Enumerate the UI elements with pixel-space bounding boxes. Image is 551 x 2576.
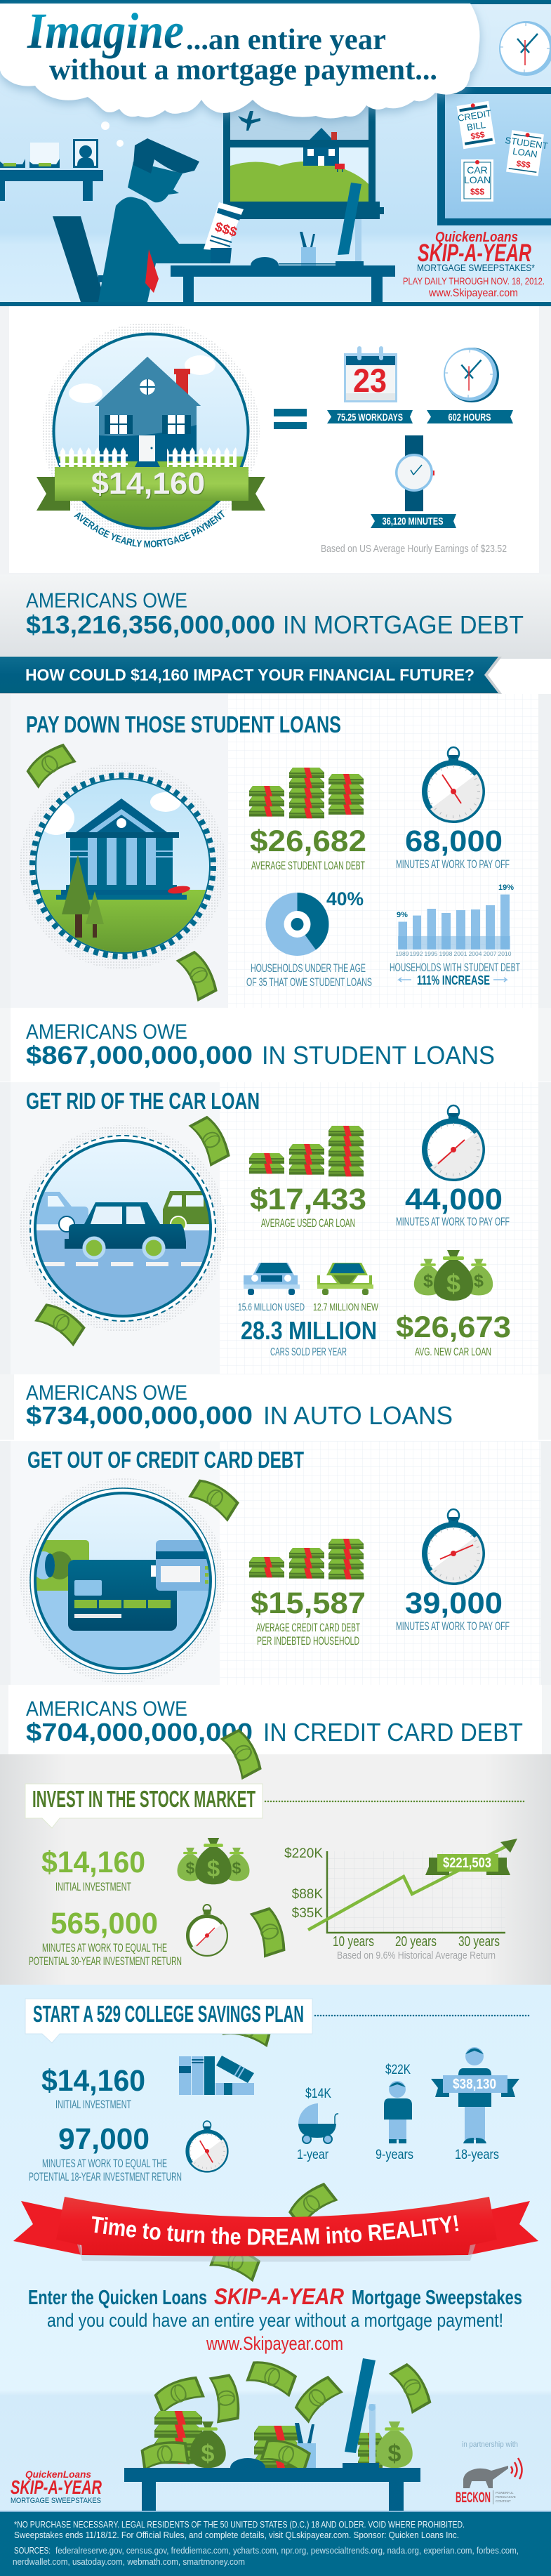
stat: new car loan: AVG. NEW CAR LOAN	[415, 1346, 491, 1358]
icon: falling bill	[188, 1113, 233, 1167]
stat: minutes to pay off	[396, 824, 510, 871]
icon: college graduate with ribbon	[431, 2047, 519, 2162]
icon: money bags: $	[232, 1859, 241, 1877]
partner logo: Beckon: BECKON	[456, 2490, 491, 2506]
badge: house with ribbon: AVERAGE YEARLY MORTGAGE PAYMENT	[74, 510, 225, 548]
icon: child: 9-years	[376, 2148, 413, 2162]
middle money pile	[254, 2426, 301, 2469]
stat: cars sold per year	[238, 1301, 379, 1358]
stat: minutes at work: POTENTIAL 30-YEAR INVESTMENT RETURN	[29, 1954, 182, 1968]
heading callout: START A 529 COLLEGE SAVINGS PLAN	[33, 2001, 304, 2027]
stat: initial investment: $14,160	[41, 1846, 145, 1879]
note: car loan: CAR	[467, 164, 488, 176]
badge: university building	[20, 763, 226, 969]
ribbon: final value: $221,503	[443, 1855, 491, 1871]
sweepstakes logo: SKIP-A-YEAR	[11, 2476, 102, 2498]
banner: financial future question	[0, 657, 502, 694]
banner: financial future question: HOW COULD $14,160 IMPACT YOUR FINANCIAL FUTURE?	[25, 666, 474, 684]
stat: minutes at work: 565,000	[51, 1907, 158, 1940]
panel: credit debt total: IN CREDIT CARD DEBT	[263, 1718, 523, 1747]
window scene	[223, 91, 384, 219]
stat: minutes to pay off: 68,000	[405, 824, 503, 858]
line chart: investment growth: $88K	[292, 1887, 323, 1902]
panel: credit card debt	[0, 1441, 551, 1685]
icon: college graduate with ribbon: 18-years	[455, 2148, 499, 2162]
corkboard with bills	[437, 87, 551, 225]
right money pile	[358, 2433, 383, 2469]
heading callout	[25, 1999, 312, 2043]
footer: legal and sources: Sweepstakes ends 11/18/12. For Official Rules, and complete details, visit QLskipayear.com. Sponsor: Quicken Loans Inc.	[14, 2530, 459, 2540]
text: sweepstakes call to action	[28, 2284, 522, 2354]
back car: green	[163, 1191, 209, 1224]
note: student loan: STUDENT	[505, 135, 549, 151]
stat: used car loan: $17,433	[250, 1183, 366, 1216]
heading callout: INVEST IN THE STOCK MARKET	[32, 1786, 255, 1812]
stat: credit card debt: $15,587	[251, 1586, 366, 1620]
partner logo: Beckon: in partnership with	[462, 2440, 518, 2449]
panel: mortgage debt total: IN MORTGAGE DEBT	[283, 610, 524, 639]
text: sweepstakes call to action: www.Skipayear.com	[206, 2333, 343, 2354]
stat: credit card debt: PER INDEBTED HOUSEHOLD	[257, 1634, 359, 1648]
stat: average student loan debt: AVERAGE STUDENT LOAN DEBT	[251, 859, 365, 872]
badge: cars on road	[20, 1125, 226, 1332]
heading: GET OUT OF CREDIT CARD DEBT	[27, 1447, 304, 1473]
sweepstakes logo: MORTGAGE SWEEPSTAKES*	[417, 262, 535, 273]
icon: stopwatch	[425, 747, 482, 820]
bar chart: households with student debt: 2007	[484, 950, 497, 957]
icon: money bags: $	[186, 1859, 195, 1877]
icon: stopwatch	[425, 1509, 482, 1582]
note: credit bill: BILL	[466, 119, 486, 133]
line chart: investment growth: 20 years	[395, 1934, 437, 1950]
icon: new car front	[317, 1263, 373, 1295]
badge: credit cards	[20, 1478, 225, 1683]
icon: falling bill	[175, 948, 220, 1001]
stat: initial investment: $14,160	[41, 2064, 145, 2098]
stat: initial investment	[41, 2064, 145, 2111]
stat: minutes at work	[29, 2122, 182, 2183]
icon: falling bill	[23, 741, 77, 789]
bar chart: households with student debt	[390, 883, 520, 987]
line chart: investment growth: 30 years	[458, 1934, 500, 1950]
icon: baby stroller: 1-year	[297, 2148, 329, 2162]
note: hourly earnings: Based on US Average Hourly Earnings of $23.52	[321, 543, 507, 555]
bar chart: households with student debt: 2004	[469, 950, 482, 957]
panel: yearly mortgage payment	[0, 306, 551, 574]
stat: cars sold per year: CARS SOLD PER YEAR	[270, 1346, 347, 1358]
icon: calendar: 23	[353, 362, 387, 399]
footer: legal and sources: SOURCES:	[14, 2546, 51, 2556]
icon: baby stroller: $14K	[305, 2087, 331, 2101]
stat: new car loan: $26,673	[396, 1310, 511, 1344]
panel: mortgage debt total	[0, 574, 551, 659]
top bar	[0, 0, 551, 4]
stat: initial investment	[41, 1846, 145, 1893]
illustration: desk with flying money	[124, 2357, 434, 2511]
chair	[53, 216, 105, 302]
stat: minutes at work: 97,000	[58, 2122, 150, 2156]
shelf with trays and photo	[0, 139, 103, 201]
desk	[124, 2468, 420, 2482]
donut chart: 40 percent: HOUSEHOLDS UNDER THE AGE	[251, 961, 366, 975]
icon: calendar	[344, 346, 397, 402]
icon: falling bill	[34, 1299, 88, 1346]
icon: clock	[444, 348, 499, 402]
icon: bill behind callout	[223, 2010, 274, 2047]
note: credit bill	[456, 101, 496, 149]
icon: child	[376, 2063, 413, 2162]
panel: student loans	[0, 694, 551, 1008]
bar chart: households with student debt: 111% INCREASE	[417, 973, 490, 987]
icon: falling bill	[250, 1905, 288, 1958]
panel: stock market	[0, 1754, 551, 1985]
bar chart: households with student debt: 19%	[498, 883, 514, 892]
icon: falling bill	[209, 2242, 262, 2282]
bar chart: households with student debt: 1992	[410, 950, 423, 957]
donut chart: 40 percent: 40%	[326, 888, 364, 909]
stat: cars sold per year: 28.3 MILLION	[241, 1316, 377, 1345]
heading callout	[25, 1784, 263, 1828]
stat: minutes to pay off	[396, 1183, 510, 1228]
partner logo: Beckon	[456, 2440, 522, 2506]
thought cloud	[0, 4, 480, 118]
icon: money bags	[178, 1838, 249, 1884]
chimney	[174, 369, 190, 397]
stat: credit card debt: AVERAGE CREDIT CARD DEBT	[256, 1621, 360, 1634]
note: car loan: $$$	[470, 187, 484, 197]
small house roof	[310, 128, 333, 140]
plane icon	[238, 111, 260, 131]
bar chart: households with student debt: 2001	[454, 950, 467, 957]
bar chart: households with student debt: 9%	[397, 911, 408, 919]
stat: minutes to pay off: 39,000	[405, 1586, 503, 1620]
ribbon: workdays: 75.25 WORKDAYS	[337, 412, 403, 423]
sweepstakes logo: MORTGAGE SWEEPSTAKES	[11, 2497, 101, 2505]
heading: GET RID OF THE CAR LOAN	[26, 1088, 260, 1114]
icon: green stopwatch	[188, 1905, 227, 1955]
illustration: desk with flying money: $	[201, 2440, 215, 2467]
bar chart: households with student debt: 1989	[396, 950, 409, 957]
bar chart: households with student debt: 1998	[439, 950, 453, 957]
house	[95, 357, 201, 461]
donut chart: 40 percent	[246, 888, 372, 989]
sweepstakes logo	[11, 2469, 102, 2505]
badge: house with ribbon	[36, 324, 265, 548]
icon: money bags: $	[474, 1271, 484, 1291]
bar chart: households with student debt: 2010	[498, 950, 512, 957]
icon: stopwatch	[425, 1105, 482, 1178]
note: car loan	[461, 159, 493, 202]
note: credit bill: CREDIT	[457, 107, 492, 124]
stat: cars sold per year: 12.7 MILLION NEW	[313, 1301, 379, 1313]
left money pile	[154, 2411, 202, 2464]
panel: auto debt total	[0, 1374, 551, 1440]
panel: mortgage debt total: AMERICANS OWE	[26, 589, 187, 612]
partner logo: Beckon: POWERFUL	[496, 2491, 514, 2495]
stat: average student loan debt: $26,682	[250, 824, 366, 858]
icon: money stacks	[249, 1126, 364, 1176]
stat: minutes to pay off: 44,000	[405, 1183, 503, 1216]
title	[27, 3, 437, 86]
footer: legal and sources: nerdwallet.com, usatoday.com, webmath.com, smartmoney.com	[13, 2557, 245, 2567]
icon: money bags: $	[207, 1855, 220, 1881]
note: student loan: $$$	[516, 159, 531, 170]
text: sweepstakes call to action: Enter the Quicken Loans	[28, 2287, 207, 2309]
bill in hand: $$$	[213, 220, 239, 240]
panel: auto debt total: $734,000,000,000	[26, 1401, 253, 1430]
ribbon: final value	[425, 1854, 510, 1875]
sweepstakes logo: QuickenLoans	[25, 2469, 91, 2480]
line chart: investment growth: 10 years	[333, 1934, 374, 1950]
panel: 529 college savings	[0, 1985, 551, 2511]
stat: minutes at work: MINUTES AT WORK TO EQUAL THE	[42, 1941, 167, 1954]
panel: student debt total	[0, 1008, 551, 1082]
equals sign	[274, 409, 307, 429]
desk	[171, 183, 395, 302]
stat: new car loan	[396, 1310, 511, 1358]
panel: student debt total: $867,000,000,000	[26, 1041, 253, 1070]
icon: money stacks	[249, 768, 364, 818]
note: credit bill: $$$	[470, 129, 486, 141]
footer: legal and sources: federalreserve.gov, census.gov, freddiemac.com, ycharts.com, npr.org, pewsocialtrends.org, nada.org, experian.com, forbes.com,	[55, 2546, 519, 2556]
title: Imagine	[27, 3, 184, 59]
bar chart: households with student debt: 1995	[425, 950, 438, 957]
icon: used car front	[244, 1263, 300, 1295]
bottom bar	[0, 302, 551, 306]
stat: cars sold per year: 15.6 MILLION USED	[238, 1301, 305, 1313]
panel: credit debt total: AMERICANS OWE	[26, 1697, 187, 1721]
ribbon: hours	[427, 410, 513, 423]
icon: stopwatch	[187, 2121, 227, 2171]
panel: car loan	[0, 1082, 551, 1374]
icon: baby stroller	[297, 2087, 338, 2162]
banner: dream into reality: Time to turn the DREAM into REALITY!	[91, 2215, 459, 2245]
text: sweepstakes call to action: SKIP-A-YEAR	[214, 2284, 344, 2309]
stat: initial investment: INITIAL INVESTMENT	[55, 2098, 131, 2111]
footer: legal and sources	[0, 2511, 551, 2576]
icon: books	[179, 2056, 254, 2095]
line chart: investment growth: $35K	[292, 1906, 323, 1921]
line chart: investment growth	[284, 1839, 517, 1961]
stat: minutes at work: MINUTES AT WORK TO EQUAL THE	[42, 2157, 167, 2170]
panel: credit debt total: $704,000,000,000	[26, 1718, 253, 1747]
stat: average student loan debt	[250, 824, 366, 872]
panel: student debt total: IN STUDENT LOANS	[262, 1041, 495, 1070]
icon: falling bill across sections	[220, 1726, 265, 1780]
tie	[145, 249, 159, 293]
back car: light blue	[36, 1192, 88, 1224]
caption on arc	[74, 515, 227, 548]
panel: header illustration	[0, 0, 551, 306]
icon: money bags	[414, 1250, 493, 1301]
partner logo: Beckon: PERSUASIVE	[496, 2495, 516, 2499]
panel: mortgage debt total: $13,216,356,000,000	[26, 610, 275, 639]
icon: college graduate with ribbon: $38,130	[453, 2077, 496, 2092]
ribbon: minutes	[371, 514, 456, 528]
main car	[65, 1202, 186, 1258]
panel: auto debt total: AMERICANS OWE	[26, 1381, 187, 1405]
sweepstakes logo: www.Skipayear.com	[428, 287, 518, 299]
panel: auto debt total: IN AUTO LOANS	[263, 1401, 453, 1430]
stat: minutes to pay off	[396, 1586, 510, 1633]
panel: student debt total: AMERICANS OWE	[26, 1020, 187, 1044]
person at desk	[53, 138, 244, 302]
note: student loan: LOAN	[512, 146, 538, 159]
stat: credit card debt	[251, 1586, 366, 1648]
donut chart: 40 percent: OF 35 THAT OWE STUDENT LOANS	[246, 975, 372, 989]
ribbon: workdays	[327, 410, 413, 423]
note: student loan	[500, 129, 550, 177]
heading: PAY DOWN THOSE STUDENT LOANS	[26, 711, 341, 737]
partner logo: Beckon: CONTENT	[496, 2499, 511, 2503]
bill in hand	[204, 202, 244, 251]
ribbon: hours: 602 HOURS	[448, 412, 491, 423]
title: without a mortgage payment...	[49, 54, 437, 86]
icon: money bags: $	[446, 1269, 460, 1298]
badge: house with ribbon: $14,160	[91, 466, 205, 501]
icon: child: $22K	[385, 2063, 411, 2077]
icon: falling bill	[188, 1476, 241, 1522]
stat: minutes at work	[29, 1907, 182, 1968]
icon: falling bill	[286, 2180, 338, 2229]
stat: used car loan	[250, 1183, 366, 1230]
ribbon: minutes: 36,120 MINUTES	[382, 515, 444, 527]
line chart: investment growth: $220K	[284, 1846, 323, 1861]
line chart: investment growth: Based on 9.6% Historical Average Return	[337, 1950, 496, 1961]
stat: used car loan: AVERAGE USED CAR LOAN	[261, 1216, 355, 1230]
stat: minutes at work: POTENTIAL 18-YEAR INVESTMENT RETURN	[29, 2170, 182, 2183]
main credit card	[68, 1560, 177, 1631]
stat: initial investment: INITIAL INVESTMENT	[55, 1880, 131, 1893]
note: car loan: LOAN	[464, 174, 491, 185]
icon: money bags: $	[423, 1271, 433, 1291]
icon: wall clock	[499, 21, 551, 76]
icon: wristwatch	[395, 435, 434, 511]
thought bubbles	[101, 121, 124, 147]
illustration: desk with flying money: $	[388, 2440, 401, 2467]
sweepstakes logo	[403, 230, 545, 299]
banner: dream into reality	[13, 2197, 538, 2261]
title: ...an entire year	[186, 24, 386, 56]
footer: legal and sources: *NO PURCHASE NECESSARY. LEGAL RESIDENTS OF THE 50 UNITED STATES (D.C.) 18 AND OLDER. VOID WHERE PROHIBITED.	[14, 2520, 465, 2530]
sweepstakes logo: QuickenLoans	[435, 230, 518, 245]
icon: money stacks	[249, 1539, 364, 1579]
panel: credit debt total	[0, 1685, 551, 1754]
ribbon	[36, 477, 70, 511]
